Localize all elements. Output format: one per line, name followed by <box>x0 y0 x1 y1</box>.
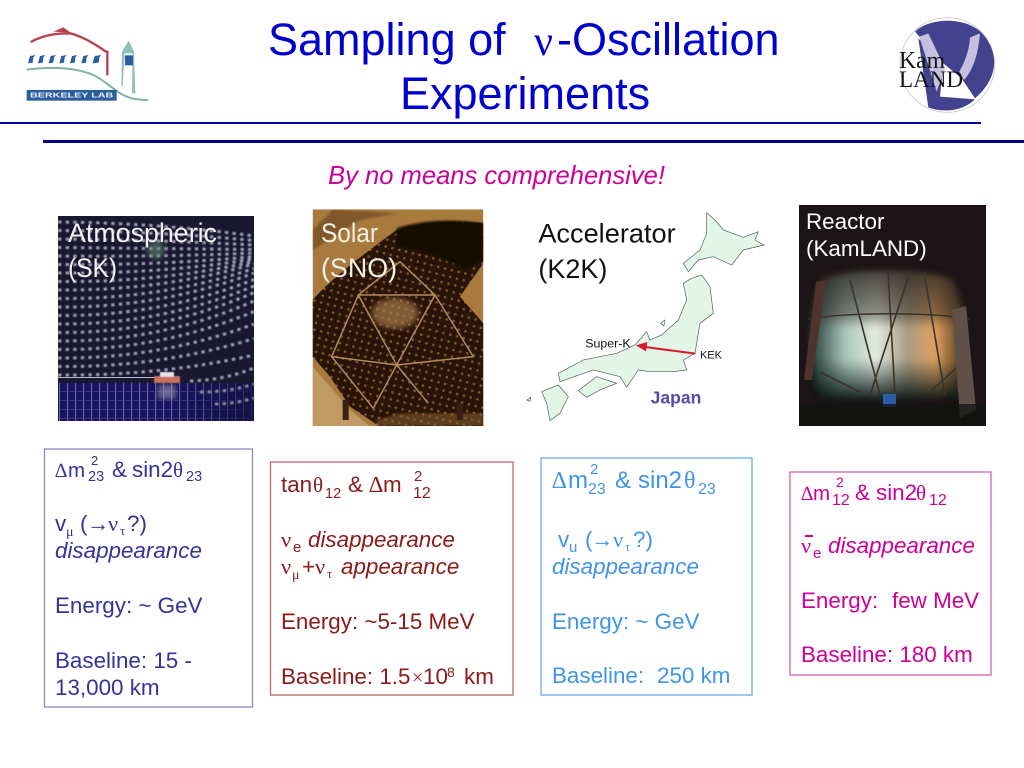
panel: reactor parameters: few MeV <box>892 588 979 613</box>
panel: accelerator parameters: 2 <box>590 461 598 478</box>
panel: solar parameters: ν <box>315 554 325 579</box>
panel: solar parameters: × <box>412 667 423 689</box>
map: Accelerator (K2K) Japan: Accelerator <box>538 219 676 249</box>
panel: atmospheric parameters: ?) <box>127 511 147 536</box>
map: Accelerator (K2K) Japan: Japan <box>651 387 701 407</box>
title: Experiments <box>400 68 650 119</box>
panel: accelerator parameters: 23 <box>588 481 606 498</box>
panel: reactor parameters: & <box>855 480 870 505</box>
panel: atmospheric parameters: v <box>55 511 67 536</box>
logo: KamLAND: Kam <box>899 48 945 74</box>
panel: accelerator parameters: disappearance <box>552 554 699 579</box>
map: Accelerator (K2K) Japan: Super-K <box>585 336 631 350</box>
map: Accelerator (K2K) Japan: (K2K) <box>538 254 607 284</box>
photo: Solar (SNO) <box>313 209 483 427</box>
panel: atmospheric parameters: sin2 <box>132 457 173 482</box>
photo: Reactor (KamLAND): (KamLAND) <box>806 236 927 261</box>
logo: Berkeley Lab <box>27 27 148 101</box>
panel: accelerator parameters: u <box>569 539 577 556</box>
title: ν <box>534 19 553 65</box>
panel: accelerator parameters: ?) <box>633 527 653 552</box>
panel: accelerator parameters: m <box>568 467 588 494</box>
panel: atmospheric parameters: disappearance <box>55 538 202 563</box>
panel: solar parameters: 2 <box>414 468 422 485</box>
photo: Atmospheric (SK) <box>58 216 254 421</box>
panel: atmospheric parameters: 2 <box>91 453 98 468</box>
panel: accelerator parameters: θ <box>684 468 696 494</box>
panel: reactor parameters: ν <box>801 533 811 558</box>
panel: accelerator parameters <box>541 458 752 695</box>
map: Accelerator (K2K) Japan: KEK <box>700 350 723 362</box>
panel: solar parameters: 12 <box>325 486 341 502</box>
panel: reactor parameters: 12 <box>832 492 850 509</box>
panel: atmospheric parameters: ∆ <box>55 460 67 482</box>
panel: atmospheric parameters: Energy: ~ GeV <box>55 593 203 618</box>
panel: atmospheric parameters: τ <box>120 523 125 538</box>
panel: accelerator parameters: 23 <box>698 481 716 498</box>
panel: atmospheric parameters: 13,000 km <box>55 675 160 700</box>
map: Accelerator (K2K) Japan <box>527 213 764 421</box>
panel: solar parameters: ν <box>281 554 291 579</box>
panel: accelerator parameters: ( <box>585 527 593 552</box>
photo: Atmospheric (SK): Atmospheric <box>68 218 217 248</box>
panel: reactor parameters: e <box>813 545 821 562</box>
panel: solar parameters: Baseline: 1.5 <box>281 664 410 689</box>
logo: KamLAND <box>899 18 995 112</box>
panel: solar parameters: & <box>348 472 363 497</box>
panel: reactor parameters <box>790 472 991 675</box>
title: Sampling of <box>268 14 506 65</box>
panel: atmospheric parameters: ( <box>80 511 88 536</box>
panel: atmospheric parameters: → <box>87 511 109 536</box>
panel: accelerator parameters: Energy: ~ GeV <box>552 609 700 634</box>
panel: atmospheric parameters: & <box>112 457 127 482</box>
panel: solar parameters: km <box>464 664 494 689</box>
panel: reactor parameters: ∆ <box>801 483 813 505</box>
panel: atmospheric parameters: 23 <box>88 469 104 485</box>
panel: reactor parameters: sin2 <box>876 480 917 505</box>
title <box>268 14 780 119</box>
panel: solar parameters: Energy: ~5-15 MeV <box>281 609 475 634</box>
panel: accelerator parameters: Baseline: <box>552 663 644 688</box>
panel: solar parameters: ∆ <box>369 472 383 497</box>
panel: solar parameters: m <box>383 472 402 497</box>
panel: accelerator parameters: 250 km <box>657 663 730 688</box>
panel: reactor parameters: 2 <box>836 474 844 490</box>
panel: atmospheric parameters: ν <box>108 511 118 536</box>
panel: atmospheric parameters: 23 <box>186 469 202 485</box>
panel: solar parameters: τ <box>327 566 332 581</box>
photo: Reactor (KamLAND) <box>799 205 986 426</box>
panel: accelerator parameters: v <box>558 527 570 552</box>
panel: accelerator parameters: ν <box>613 527 623 552</box>
panel: reactor parameters: Energy: <box>801 588 878 613</box>
panel: reactor parameters: θ <box>916 481 926 505</box>
panel: accelerator parameters: & <box>615 467 631 494</box>
panel: solar parameters: 8 <box>447 664 455 680</box>
logo: Berkeley Lab: BERKELEY LAB <box>30 91 113 100</box>
panel: accelerator parameters: ∆ <box>552 468 567 494</box>
panel: accelerator parameters: sin2 <box>638 467 682 494</box>
panel: reactor parameters: m <box>813 482 830 505</box>
panel: solar parameters: θ <box>313 473 323 497</box>
panel: solar parameters <box>270 462 513 695</box>
panel: atmospheric parameters: μ <box>66 525 74 540</box>
panel: solar parameters: 12 <box>413 485 431 502</box>
panel: accelerator parameters: → <box>591 527 613 552</box>
photo: Solar (SNO): Solar <box>321 218 378 248</box>
panel: atmospheric parameters <box>44 449 252 707</box>
panel: atmospheric parameters: Baseline: 15 - <box>55 648 192 673</box>
panel: atmospheric parameters: θ <box>173 458 183 482</box>
panel: solar parameters: disappearance <box>308 527 455 552</box>
panel: reactor parameters: 12 <box>929 492 947 509</box>
title: -Oscillation <box>557 14 780 65</box>
panel: solar parameters: tan <box>281 472 312 497</box>
panel: solar parameters: e <box>293 539 301 556</box>
panel: solar parameters: appearance <box>341 554 459 579</box>
panel: accelerator parameters: τ <box>625 539 630 554</box>
panel: reactor parameters: disappearance <box>828 533 975 558</box>
panel: reactor parameters: Baseline: 180 km <box>801 642 973 667</box>
photo: Solar (SNO): (SNO) <box>321 253 397 283</box>
photo: Atmospheric (SK): (SK) <box>68 253 117 283</box>
panel: solar parameters: + <box>302 554 315 579</box>
logo: KamLAND: LAND <box>899 67 963 92</box>
panel: solar parameters: 10 <box>423 664 448 689</box>
photo: Reactor (KamLAND): Reactor <box>806 209 885 234</box>
panel: solar parameters: μ <box>292 568 300 583</box>
panel: solar parameters: ν <box>281 527 291 552</box>
subtitle: By no means comprehensive! <box>328 162 665 190</box>
panel: atmospheric parameters: m <box>68 459 85 482</box>
